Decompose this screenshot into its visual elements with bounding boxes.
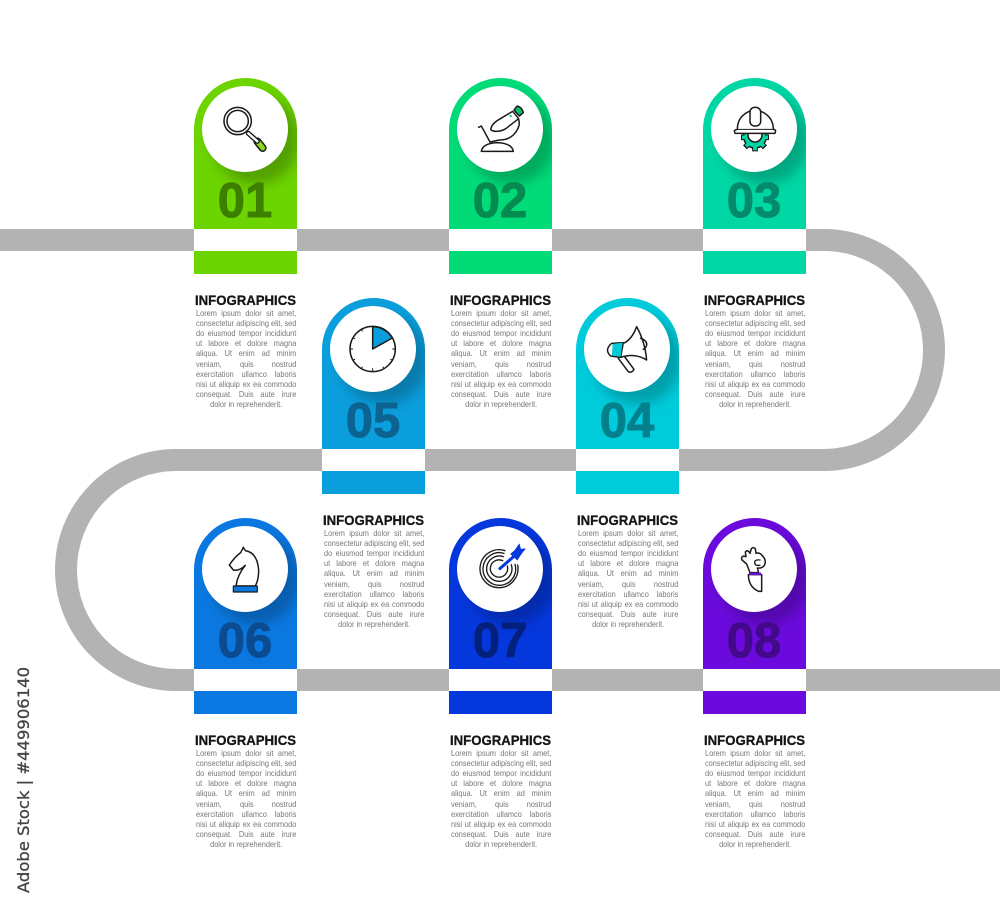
icon: megaphone: [608, 327, 647, 372]
body text: consequat. Duis aute irure: [450, 829, 551, 839]
body text: do eiusmod tempor incididunt: [578, 548, 678, 558]
body text: veniam, quis nostrud: [196, 799, 296, 809]
card body 01: [194, 78, 297, 229]
heading: INFOGRAPHICS: [450, 292, 551, 308]
body text: aliqua. Ut enim ad minim: [704, 348, 805, 358]
heading: INFOGRAPHICS: [704, 292, 805, 308]
heading: INFOGRAPHICS: [323, 512, 424, 528]
number 07: 07: [473, 614, 527, 668]
body text: do eiusmod tempor incididunt: [196, 768, 296, 778]
body text: veniam, quis nostrud: [578, 579, 678, 589]
body text: exercitation ullamco laboris: [578, 589, 678, 599]
body text: consectetur adipiscing elit, sed: [578, 538, 678, 548]
heading: INFOGRAPHICS: [195, 732, 296, 748]
body text: veniam, quis nostrud: [196, 359, 296, 369]
body text: do eiusmod tempor incididunt: [450, 768, 551, 778]
body text: ut labore et dolore magna: [450, 338, 551, 348]
body text: exercitation ullamco laboris: [704, 369, 805, 379]
body text: [196, 308, 296, 409]
body text: aliqua. Ut enim ad minim: [578, 568, 678, 578]
number 02: 02: [473, 174, 527, 228]
body text: Lorem ipsum dolor sit amet,: [578, 528, 678, 538]
body text: do eiusmod tempor incididunt: [196, 328, 296, 338]
body text: consequat. Duis aute irure: [704, 389, 805, 399]
body text: [450, 308, 552, 409]
body text: exercitation ullamco laboris: [324, 589, 424, 599]
step 03: [703, 78, 806, 409]
body text: veniam, quis nostrud: [324, 579, 424, 589]
step 06: [194, 518, 297, 849]
number 01: 01: [218, 174, 272, 228]
body text: ut labore et dolore magna: [324, 558, 424, 568]
card body 02: [449, 78, 552, 229]
number 04: 04: [600, 394, 654, 448]
body text: ut labore et dolore magna: [196, 338, 296, 348]
body text: consequat. Duis aute irure: [704, 829, 805, 839]
body text: consectetur adipiscing elit, sed: [450, 318, 551, 328]
number 08: 08: [727, 614, 781, 668]
body text: veniam, quis nostrud: [450, 359, 551, 369]
body text: dolor in reprehenderit.: [719, 839, 791, 849]
heading: INFOGRAPHICS: [450, 732, 551, 748]
body text: dolor in reprehenderit.: [465, 399, 537, 409]
number 06: 06: [218, 614, 272, 668]
step 08: [703, 518, 806, 849]
heading: INFOGRAPHICS: [577, 512, 678, 528]
card body 06: [194, 518, 297, 669]
body text: aliqua. Ut enim ad minim: [450, 348, 551, 358]
body text: aliqua. Ut enim ad minim: [196, 348, 296, 358]
body text: nisi ut aliquip ex ea commodo: [578, 599, 678, 609]
body text: nisi ut aliquip ex ea commodo: [450, 379, 551, 389]
icon: target and arrow: [480, 544, 525, 588]
body text: veniam, quis nostrud: [704, 799, 805, 809]
body text: exercitation ullamco laboris: [450, 369, 551, 379]
body text: [704, 308, 806, 409]
step 04: [576, 298, 679, 629]
body text: veniam, quis nostrud: [704, 359, 805, 369]
card body 08: [703, 518, 806, 669]
icon: clock: [350, 326, 395, 372]
card body 05: [322, 298, 425, 449]
body text: aliqua. Ut enim ad minim: [450, 788, 551, 798]
step 01: [194, 78, 297, 409]
body text: dolor in reprehenderit.: [338, 619, 410, 629]
body text: dolor in reprehenderit.: [210, 839, 282, 849]
body text: consectetur adipiscing elit, sed: [196, 758, 296, 768]
body text: ut labore et dolore magna: [196, 778, 296, 788]
icon: helmet and gear: [734, 107, 776, 151]
body text: nisi ut aliquip ex ea commodo: [196, 379, 296, 389]
body text: dolor in reprehenderit.: [210, 399, 282, 409]
body text: Lorem ipsum dolor sit amet,: [324, 528, 424, 538]
body text: ut labore et dolore magna: [704, 778, 805, 788]
step 02: [449, 78, 552, 409]
body text: ut labore et dolore magna: [704, 338, 805, 348]
body text: dolor in reprehenderit.: [465, 839, 537, 849]
icon: microscope: [479, 106, 523, 151]
body text: ut labore et dolore magna: [450, 778, 551, 788]
body text: Lorem ipsum dolor sit amet,: [704, 308, 805, 318]
body text: consequat. Duis aute irure: [324, 609, 424, 619]
body text: do eiusmod tempor incididunt: [324, 548, 424, 558]
step 07: [449, 518, 552, 849]
body text: [324, 528, 424, 629]
body text: [450, 748, 552, 849]
card body 03: [703, 78, 806, 229]
icon: OK hand: [742, 548, 765, 591]
body text: consequat. Duis aute irure: [450, 389, 551, 399]
body text: Lorem ipsum dolor sit amet,: [450, 748, 551, 758]
body text: Lorem ipsum dolor sit amet,: [450, 308, 551, 318]
body text: consectetur adipiscing elit, sed: [324, 538, 424, 548]
body text: nisi ut aliquip ex ea commodo: [704, 379, 805, 389]
icon: chess knight: [229, 547, 259, 592]
body text: consequat. Duis aute irure: [196, 829, 296, 839]
card body 07: [449, 518, 552, 669]
body text: exercitation ullamco laboris: [450, 809, 551, 819]
body text: do eiusmod tempor incididunt: [704, 768, 805, 778]
body text: consectetur adipiscing elit, sed: [704, 318, 805, 328]
number 05: 05: [346, 394, 400, 448]
body text: consectetur adipiscing elit, sed: [196, 318, 296, 328]
body text: exercitation ullamco laboris: [196, 809, 296, 819]
body text: [704, 748, 806, 849]
body text: consectetur adipiscing elit, sed: [704, 758, 805, 768]
body text: do eiusmod tempor incididunt: [450, 328, 551, 338]
body text: Lorem ipsum dolor sit amet,: [704, 748, 805, 758]
body text: consequat. Duis aute irure: [578, 609, 678, 619]
body text: dolor in reprehenderit.: [592, 619, 664, 629]
body text: [578, 528, 678, 629]
body text: nisi ut aliquip ex ea commodo: [450, 819, 551, 829]
body text: exercitation ullamco laboris: [196, 369, 296, 379]
body text: consequat. Duis aute irure: [196, 389, 296, 399]
body text: veniam, quis nostrud: [450, 799, 551, 809]
heading: INFOGRAPHICS: [195, 292, 296, 308]
body text: nisi ut aliquip ex ea commodo: [704, 819, 805, 829]
body text: aliqua. Ut enim ad minim: [324, 568, 424, 578]
body text: aliqua. Ut enim ad minim: [704, 788, 805, 798]
body text: ut labore et dolore magna: [578, 558, 678, 568]
body text: exercitation ullamco laboris: [704, 809, 805, 819]
body text: nisi ut aliquip ex ea commodo: [196, 819, 296, 829]
icon: magnifier: [224, 107, 263, 148]
body text: consectetur adipiscing elit, sed: [450, 758, 551, 768]
body text: Lorem ipsum dolor sit amet,: [196, 308, 296, 318]
body text: dolor in reprehenderit.: [719, 399, 791, 409]
body text: Lorem ipsum dolor sit amet,: [196, 748, 296, 758]
body text: nisi ut aliquip ex ea commodo: [324, 599, 424, 609]
body text: do eiusmod tempor incididunt: [704, 328, 805, 338]
stock id side label: Adobe Stock | #449906140: [14, 667, 33, 893]
card body 04: [576, 298, 679, 449]
body text: aliqua. Ut enim ad minim: [196, 788, 296, 798]
step 05: [322, 298, 425, 629]
number 03: 03: [727, 174, 781, 228]
heading: INFOGRAPHICS: [704, 732, 805, 748]
body text: [196, 748, 296, 849]
